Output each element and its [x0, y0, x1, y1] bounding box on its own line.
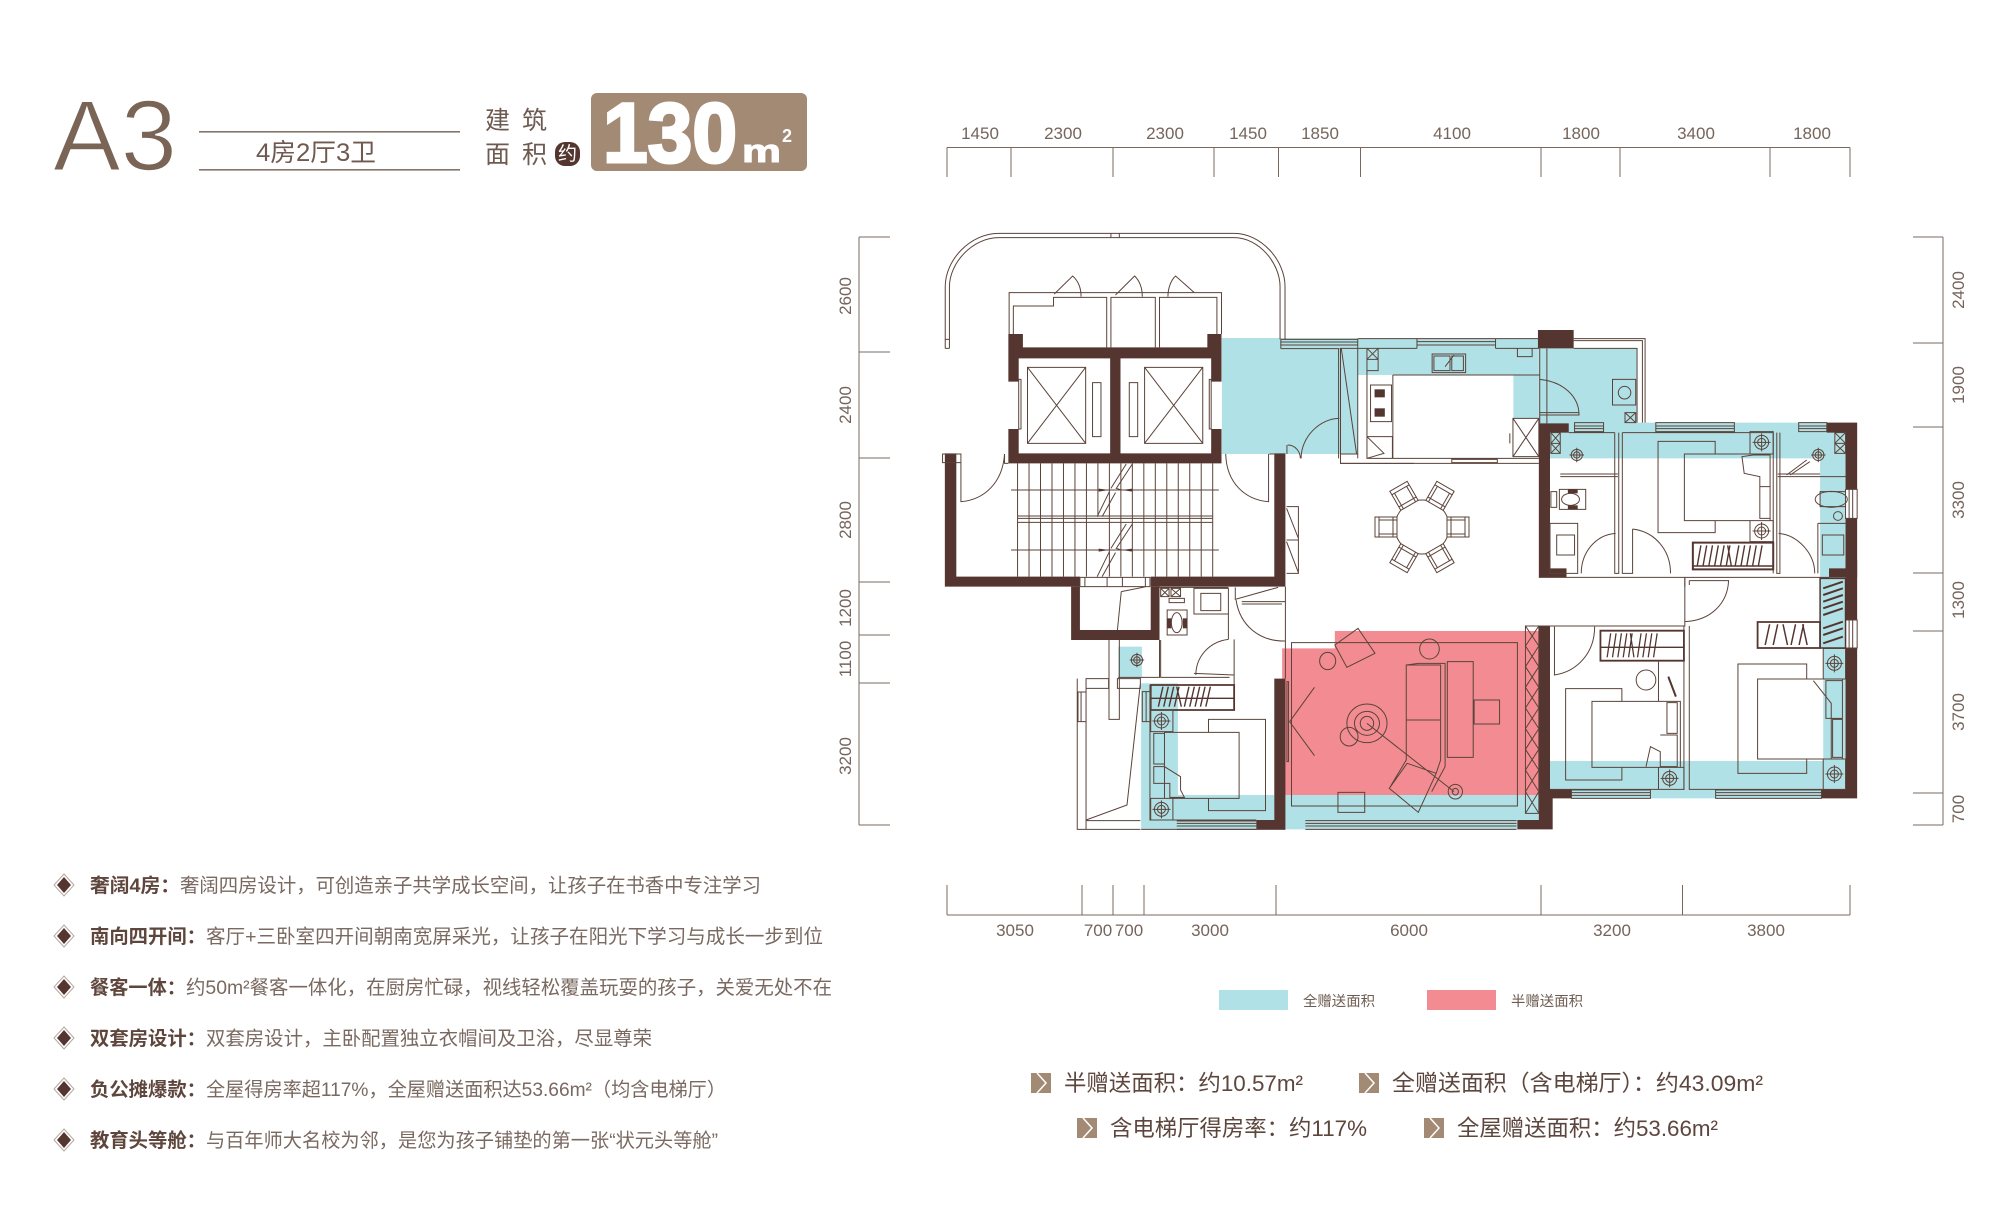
feature list [54, 874, 832, 1152]
stair doors [943, 454, 1274, 502]
balcony curve [945, 233, 1285, 348]
lower wing: living room and south bedrooms [1292, 560, 1857, 829]
floor plan [943, 233, 1857, 829]
legend [1219, 990, 1583, 1010]
feature: efficiency: 负公摊爆款： [90, 1079, 206, 1101]
left dimension line: 1200 [836, 589, 855, 627]
left dimension line: 2400 [836, 386, 855, 424]
ensuite fixtures [1778, 433, 1857, 573]
right dimension line: 2400 [1949, 271, 1968, 309]
corridor door and fridge [1287, 339, 1414, 573]
stairs [1011, 463, 1219, 577]
area badge: 130 m2: 2 [782, 126, 792, 146]
feature: south facing: 南向四开间： [90, 926, 206, 948]
feature: four rooms: 奢阔4房： [90, 875, 180, 897]
storage column [1525, 626, 1539, 813]
bottom dimension line: 700 [1084, 921, 1112, 940]
left dimension line: 2800 [836, 501, 855, 539]
right dimension line: 3700 [1949, 693, 1968, 731]
unit layout label: 4房2厅3卫 [256, 139, 376, 167]
master bedroom windows and partitions [1539, 423, 1829, 577]
bottom dimension line: 6000 [1390, 921, 1428, 940]
feature: dining and living: 餐客一体： [90, 976, 186, 999]
gift-area colour fills: upper [1222, 338, 1857, 640]
core: walls, lifts and stairs [943, 233, 1414, 587]
shafts [1009, 276, 1222, 347]
kitchen, balcony and ensuite rooms [1340, 330, 1857, 587]
bedroom four wardrobe [1151, 685, 1234, 710]
area badge: 130 m2: m [742, 133, 781, 169]
top dimension line: 1450 [1229, 124, 1267, 143]
area caption: 建筑 [485, 107, 547, 135]
left dimension line: 1100 [836, 641, 855, 677]
feature: south facing: 客厅+三卧室四开间朝南宽屏采光，让孩子在阳光下学习与成长一步到位 [206, 926, 823, 948]
area caption: 面积 [485, 141, 547, 169]
bedroom three [1738, 648, 1846, 789]
feature: education: 与百年师大名校为邻，是您为孩子铺垫的第一张“状元头等舱” [206, 1130, 718, 1152]
legend: 半赠送面积 [1511, 993, 1583, 1010]
right dimension line: 700 [1949, 795, 1968, 823]
feature: dining and living: 约50m²餐客一体化，在厨房忙碌，视线轻松覆盖玩耍的孩子，关爱无处不在 [186, 977, 832, 999]
feature: efficiency: 全屋得房率超117%，全屋赠送面积达53.66m²（均含电梯厅） [206, 1079, 726, 1101]
top dimension line: 1800 [1562, 124, 1600, 143]
living room south window [1305, 821, 1517, 829]
lower wing: service rooms and bedroom four [1071, 577, 1314, 829]
stat: half gift area: 半赠送面积：约10.57m² [1064, 1071, 1303, 1096]
bedroom four bed [1151, 710, 1266, 820]
living room rug and sofa [1292, 643, 1517, 812]
stat: efficiency rate: 含电梯厅得房率：约117% [1110, 1116, 1367, 1141]
corridor window [1281, 339, 1358, 349]
right dimension line [1913, 237, 1968, 825]
feature: double suite: 双套房设计，主卧配置独立衣帽间及卫浴，尽显尊荣 [206, 1028, 652, 1050]
top dimension line [947, 124, 1850, 177]
master bed [1658, 432, 1773, 542]
stat: total gift area: 全屋赠送面积：约53.66m² [1457, 1116, 1718, 1141]
gift-area colour fills: lower, half-gift living room [1282, 577, 1846, 829]
bottom dimension line [947, 885, 1850, 940]
right dimension line: 3300 [1949, 481, 1968, 519]
top dimension line: 4100 [1433, 124, 1471, 143]
feature: double suite [54, 1027, 652, 1050]
south bedroom windows [1571, 790, 1821, 798]
right dimension line: 1900 [1949, 366, 1968, 404]
dining table and chairs [1375, 481, 1469, 573]
top dimension line: 1850 [1301, 124, 1339, 143]
bottom dimension line: 3800 [1747, 921, 1785, 940]
bottom dimension line: 3000 [1191, 921, 1229, 940]
right dimension line: 1300 [1949, 581, 1968, 619]
legend: 全赠送面积 [1303, 992, 1375, 1010]
area badge: 130 m2 [591, 86, 807, 180]
area caption: 约 [558, 143, 577, 165]
area stats [1031, 1071, 1764, 1141]
left dimension line [836, 237, 890, 825]
top dimension line: 3400 [1677, 124, 1715, 143]
kitchen counters, hob, sink [1340, 339, 1540, 463]
title: unit type A3: A3 [53, 80, 177, 192]
top dimension line: 1450 [961, 124, 999, 143]
bottom dimension line: 700 [1115, 921, 1143, 940]
stat: full gift area: 全赠送面积（含电梯厅）：约43.09m² [1392, 1071, 1764, 1096]
top dimension line: 2300 [1146, 124, 1184, 143]
left dimension line: 3200 [836, 737, 855, 775]
top dimension line: 1800 [1793, 124, 1831, 143]
bedroom two [1550, 627, 1684, 789]
bottom dimension line: 3050 [996, 921, 1034, 940]
master wardrobe [1693, 543, 1773, 569]
small bath [1160, 587, 1285, 710]
left dimension line: 2600 [836, 277, 855, 315]
laundry balcony [1540, 339, 1645, 423]
feature: double suite: 双套房设计： [90, 1028, 206, 1050]
bottom dimension line: 3200 [1593, 921, 1631, 940]
feature: four rooms: 奢阔四房设计，可创造亲子共学成长空间，让孩子在书香中专注学习 [180, 875, 761, 897]
area caption [485, 107, 580, 169]
feature: education: 教育头等舱： [90, 1129, 206, 1152]
lift cabins [1019, 367, 1211, 443]
top dimension line: 2300 [1044, 124, 1082, 143]
area badge: 130 m2: 130 [603, 86, 737, 180]
bathroom fixtures [1550, 433, 1618, 573]
hallway boundary and door [1525, 577, 1857, 790]
gift-area colour fills: bedroom four [1118, 647, 1274, 829]
